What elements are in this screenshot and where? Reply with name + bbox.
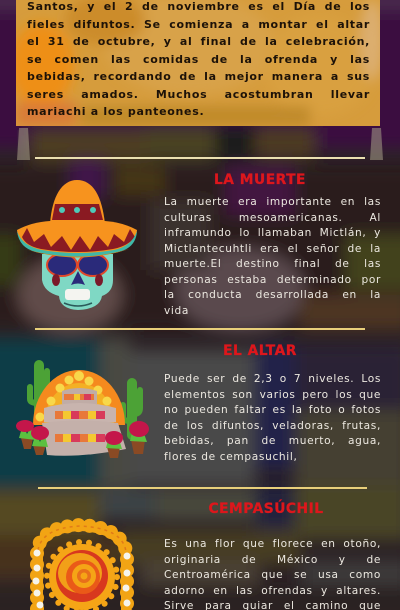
- text: el altar: flores de cempasuchil,: [164, 450, 298, 462]
- section: la muerte: [164, 172, 381, 316]
- text: cempasúchil: originaria de México y de: [164, 554, 381, 566]
- text: cempasúchil: Centroamérica que se usa como: [164, 569, 381, 581]
- icon: cempasúchil flower with garland: [32, 525, 130, 610]
- text: la muerte: culturas mesoamericanas. Al: [164, 212, 381, 224]
- text: el altar: bebidas, pan de muerto, agua,: [164, 435, 381, 447]
- text: el altar: [164, 373, 381, 462]
- intro paragraph: el 31 de octubre, y al final de la celebración,: [27, 35, 370, 48]
- intro paragraph: Santos, y el 2 de noviembre es el Día de los: [27, 0, 370, 13]
- text: el altar: elementos son varios pero los que: [164, 388, 381, 400]
- heading: cempasúchil: CEMPASÚCHIL: [208, 501, 324, 517]
- text: la muerte: muerte.El destino final de las: [164, 258, 381, 270]
- intro paragraph: seres amados. Muchos acostumbran llevar: [27, 88, 370, 100]
- panel: intro text over bread photograph: [16, 0, 380, 126]
- text: cempasúchil: [164, 538, 381, 610]
- heading: el altar: EL ALTAR: [223, 343, 297, 359]
- icon: altar with cacti: [16, 360, 149, 458]
- text: cempasúchil: Es una flor que florece en otoño,: [164, 538, 381, 550]
- panel background: [16, 0, 380, 126]
- section: cempasúchil: [164, 499, 381, 610]
- text: la muerte: [164, 196, 381, 316]
- intro paragraph: se comen las comidas de la ofrenda y las: [27, 52, 370, 66]
- text: la muerte: Mictlantecuhtli era el señor de la: [164, 242, 381, 254]
- intro paragraph: fieles difuntos. Se comienza a montar el altar: [27, 18, 370, 30]
- text: el altar: Puede ser de 2,3 o 7 niveles. Los: [164, 373, 381, 385]
- text: la muerte: vida: [164, 304, 189, 316]
- section: el altar: [164, 343, 381, 462]
- heading: la muerte: LA MUERTE: [214, 172, 306, 188]
- text: la muerte: personas estaba determinado por: [164, 274, 381, 286]
- text: la muerte: inframundo lo llamaban Mictlán, y: [164, 227, 381, 239]
- text: cempasúchil: adorno en las ofrendas y altares.: [164, 584, 381, 596]
- intro paragraph: [27, 0, 370, 118]
- text: la muerte: la conducta desarrollada en la: [164, 289, 381, 301]
- text: el altar: no pueden faltar es la foto o fotos: [164, 404, 381, 416]
- text: el altar: de los difuntos, veladoras, frutas,: [164, 420, 381, 432]
- text: la muerte: La muerte era importante en las: [164, 196, 381, 208]
- candles: [17, 128, 30, 160]
- intro paragraph: mariachi a los panteones.: [27, 105, 204, 118]
- intro paragraph: bebidas, recordando de la mejor manera a sus: [27, 70, 370, 83]
